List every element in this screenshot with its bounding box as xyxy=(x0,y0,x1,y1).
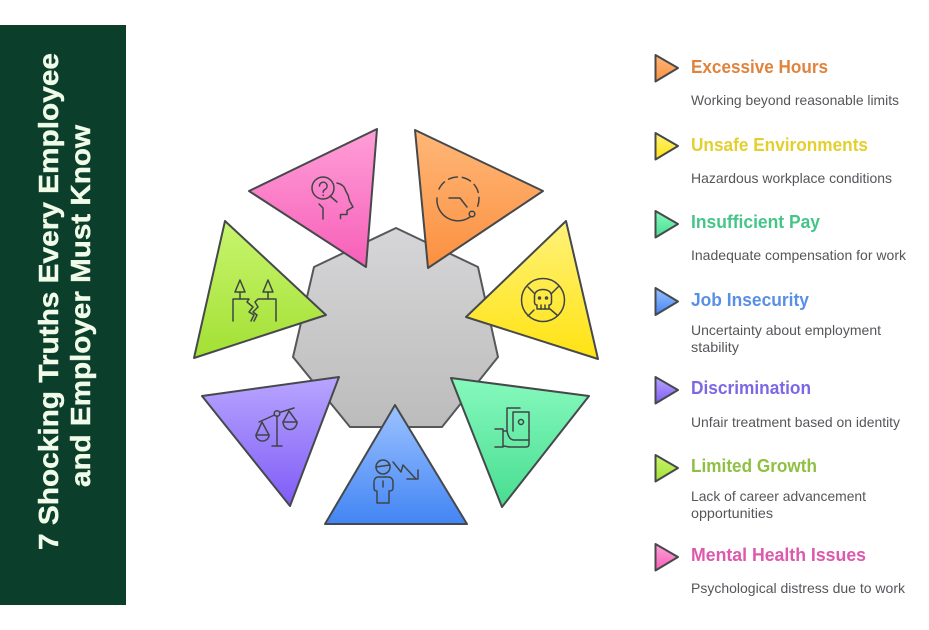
legend item: job insecurity: Job Insecurity xyxy=(691,290,809,310)
central cycle diagram xyxy=(194,129,598,524)
segment: insufficient pay xyxy=(451,378,589,507)
legend item: excessive hours xyxy=(656,55,899,108)
legend item: excessive hours: Working beyond reasonable limits xyxy=(691,92,899,108)
title xyxy=(33,53,96,550)
legend item: discrimination: Discrimination xyxy=(691,378,811,398)
segment: mental health issues xyxy=(249,129,377,267)
segment: limited growth xyxy=(194,221,326,358)
icon: skull in circle xyxy=(522,278,564,322)
icon: dashed clock xyxy=(437,177,479,221)
legend item: insufficient pay: Insufficient Pay xyxy=(691,212,820,232)
segment: discrimination xyxy=(202,377,339,506)
legend item: mental health issues: Mental Health Issues xyxy=(691,545,866,565)
icon: person with falling arrow xyxy=(374,460,418,503)
legend item: limited growth: Lack of career advancement xyxy=(691,488,866,504)
central heptagon xyxy=(293,228,498,427)
legend item: unsafe environments xyxy=(656,133,892,186)
title panel xyxy=(0,25,126,605)
segment: unsafe environments xyxy=(466,221,598,359)
title: and Employer Must Know xyxy=(65,125,96,487)
icon: hand holding money xyxy=(495,408,529,447)
legend item: unsafe environments: Hazardous workplace conditions xyxy=(691,170,892,186)
legend item: discrimination: Unfair treatment based on identity xyxy=(691,414,900,430)
segment: job insecurity xyxy=(325,405,467,524)
legend item: job insecurity: stability xyxy=(691,339,739,355)
legend item: insufficient pay xyxy=(656,211,907,263)
segment: excessive hours xyxy=(415,130,543,268)
legend item: excessive hours: Excessive Hours xyxy=(691,57,828,77)
legend item: limited growth: opportunities xyxy=(691,505,773,521)
icon: broken paths with arrows xyxy=(233,280,276,321)
legend item: unsafe environments: Unsafe Environments xyxy=(691,135,868,155)
title: 7 Shocking Truths Every Employee xyxy=(33,53,64,550)
legend item: job insecurity: Uncertainty about employment xyxy=(691,322,881,338)
legend item: mental health issues xyxy=(656,544,906,596)
legend item: limited growth xyxy=(656,455,866,521)
legend item: insufficient pay: Inadequate compensation for work xyxy=(691,247,907,263)
icon: scales xyxy=(256,408,297,446)
legend item: job insecurity xyxy=(656,288,881,355)
icon: head with question magnifier xyxy=(312,177,353,219)
legend item: limited growth: Limited Growth xyxy=(691,456,817,476)
legend item: mental health issues: Psychological distress due to work xyxy=(691,580,906,596)
legend item: discrimination xyxy=(656,377,900,430)
legend xyxy=(656,55,907,596)
